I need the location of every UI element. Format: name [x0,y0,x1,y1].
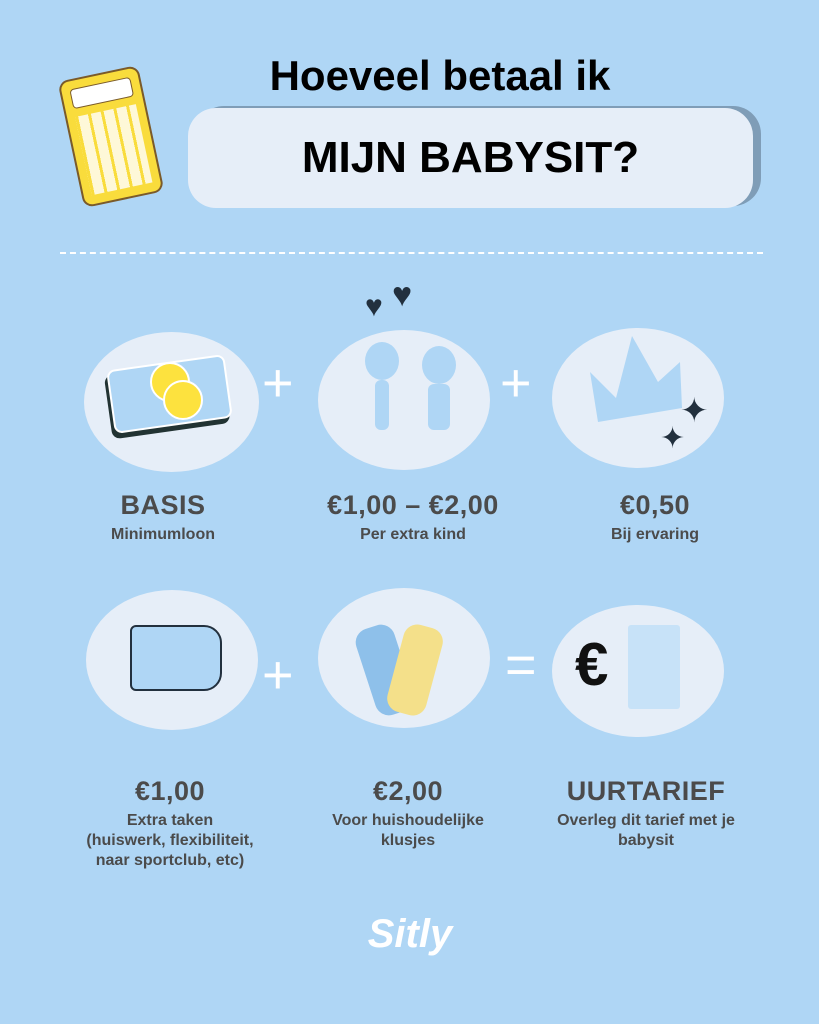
label: uurtarief [557,776,735,849]
icon: calculator [57,65,165,208]
row 1 circles [84,332,259,472]
label: huishoudelijk [332,776,484,849]
label: huishoudelijk: Voor huishoudelijke [332,812,484,829]
label: basis: BASIS [120,490,206,520]
label: extra taken: Extra taken [127,812,213,829]
icon: children: ♥ [365,290,383,323]
icon: thumbs up [130,625,222,691]
title line 2: MIJN BABYSIT? [302,133,639,182]
logo: Sitly [368,912,452,956]
icon: coins [150,362,190,402]
label: extra taken: (huiswerk, flexibiliteit, [86,832,254,849]
row 2 circles [86,590,258,730]
label: extra taken: €1,00 [135,776,205,806]
icon: children [365,276,456,430]
title banner [188,108,753,208]
icon: money [106,354,233,434]
text: + [500,353,532,413]
label: extra kind: €1,00 – €2,00 [327,490,499,520]
label: uurtarief: Overleg dit tarief met je [557,812,735,829]
icon: crown: ✦ [680,392,708,430]
text: = [505,635,537,695]
label: huishoudelijk: €2,00 [373,776,443,806]
icon: euro and receipt: € [575,631,608,698]
label: ervaring: Bij ervaring [611,526,699,543]
icon: crown: ✦ [660,422,685,455]
icon: crown [590,336,708,455]
icon: gloves [352,621,418,719]
label: basis: Minimumloon [111,526,215,543]
label: extra taken: naar sportclub, etc) [96,852,244,869]
plus signs: + [262,353,294,413]
label: extra kind [327,490,499,543]
label: uurtarief: UURTARIEF [567,776,725,806]
label: basis [111,490,215,543]
label: extra taken [86,776,254,869]
label: uurtarief: babysit [618,832,674,849]
plus and equals: + [262,645,294,705]
icon: children: ♥ [392,276,412,314]
title line 1: Hoeveel betaal ik [270,52,610,99]
label: ervaring [611,490,699,543]
label: huishoudelijk: klusjes [381,832,435,849]
label: ervaring: €0,50 [620,490,690,520]
divider [60,252,763,254]
label: extra kind: Per extra kind [360,526,466,543]
